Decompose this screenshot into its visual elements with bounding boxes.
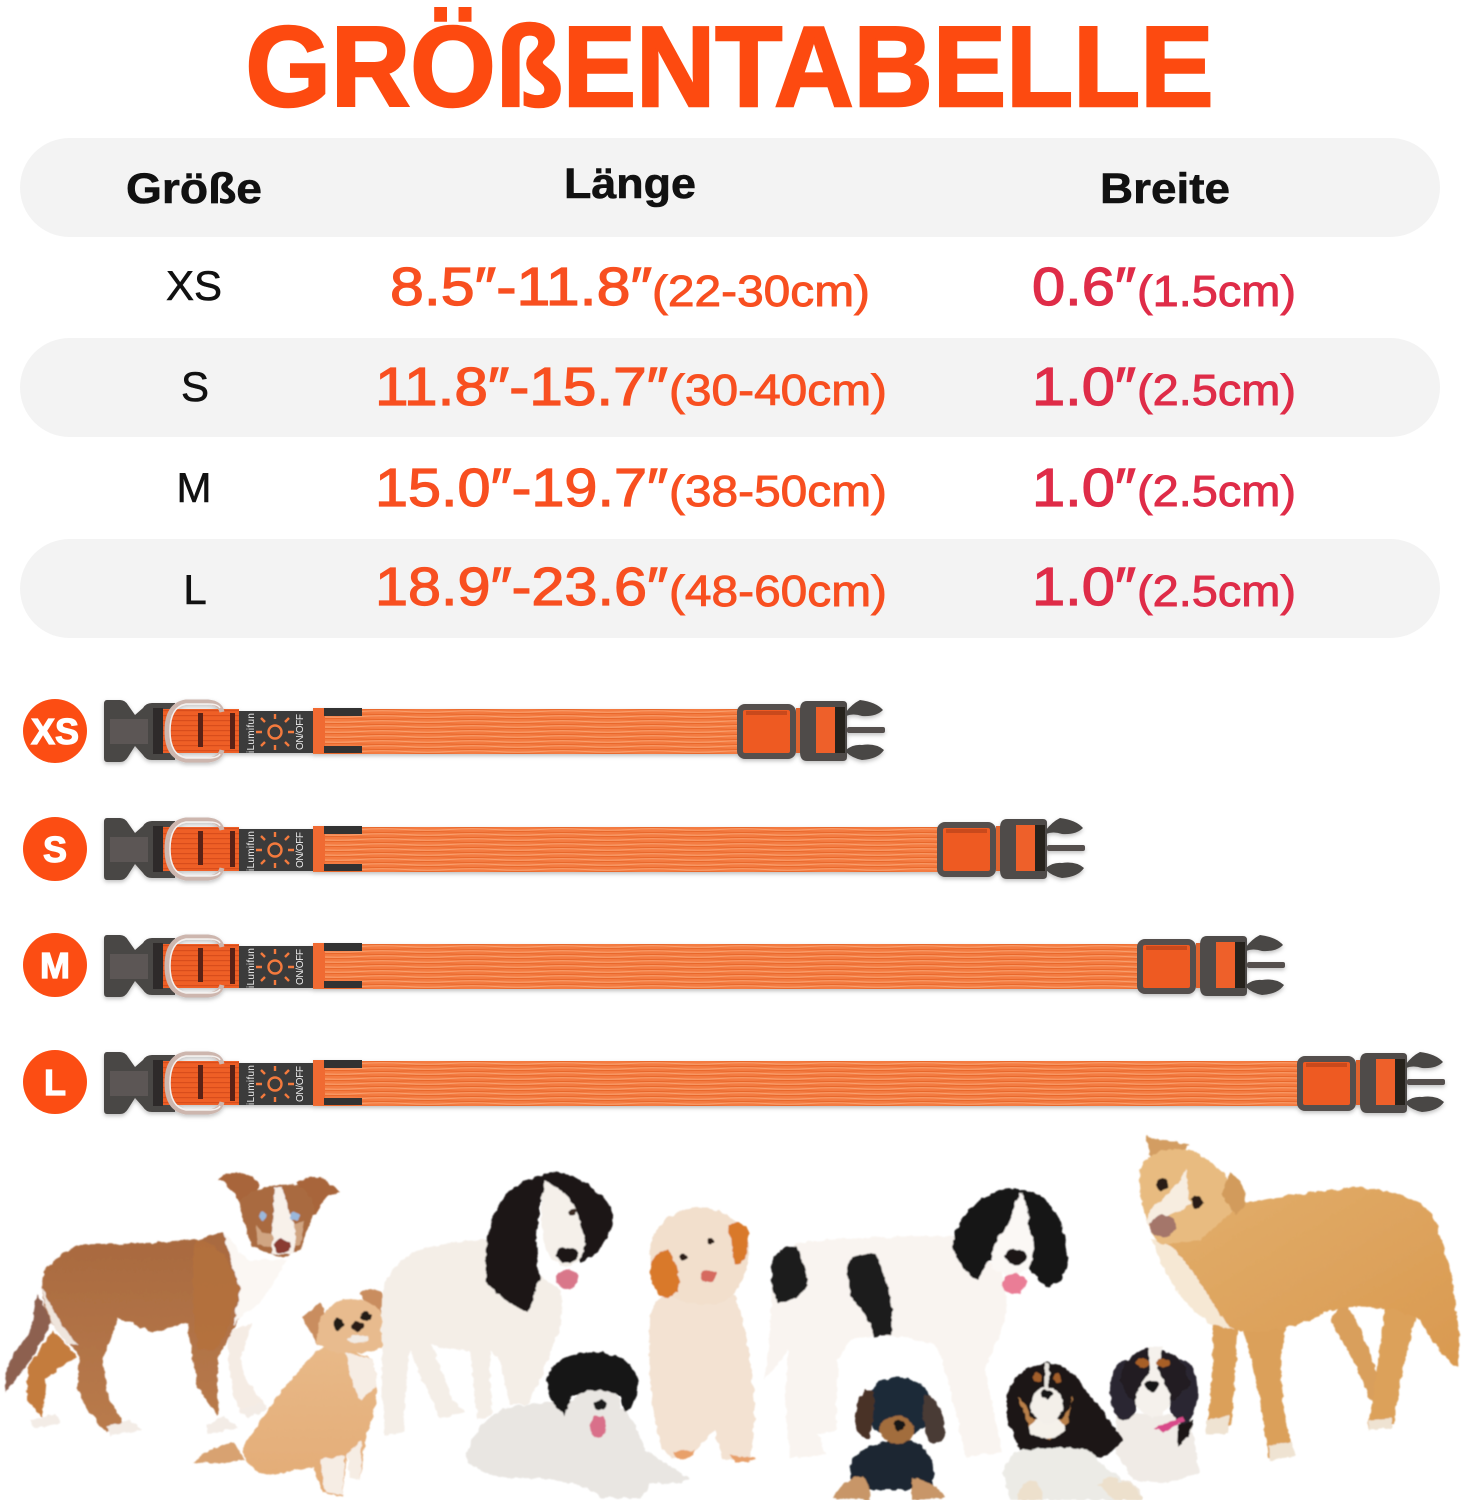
row M [176,458,1296,518]
row S: (30-40cm) [669,366,887,415]
collar L with size badge: iLumifun [246,1065,257,1105]
collar XS with size badge: ON/OFF [295,714,306,750]
row XS: XS [166,262,222,309]
table header row: Größe [126,165,262,213]
row M: (38-50cm) [669,467,887,516]
table header row [20,138,1440,237]
collar L with size badge: L [44,1062,66,1103]
collar M with size badge: ON/OFF [295,949,306,985]
collar L with size badge: ON/OFF [295,1066,306,1102]
row M: M [176,464,212,511]
table header row: Länge [564,160,696,208]
dog: black and white lying [465,1352,689,1498]
row XS: 8.5″-11.8″ [390,257,652,317]
row XS [166,257,1296,317]
collar M with size badge: M [40,945,70,986]
row XS: 0.6″ [1032,257,1136,317]
row S [20,338,1440,437]
row M: (2.5cm) [1137,467,1296,516]
title: GRÖßENTABELLE [246,4,1214,131]
row L [20,539,1440,638]
dog: brown shepherd puppy [5,1173,341,1435]
collar XS with size badge: iLumifun [246,713,257,753]
size table [20,138,1440,638]
row S: 11.8″-15.7″ [375,357,668,417]
row XS: (1.5cm) [1137,267,1296,316]
collar M with size badge: iLumifun [246,948,257,988]
row S: 1.0″ [1032,357,1136,417]
dog: cavalier spaniel lying [1003,1363,1142,1500]
group of dogs photo [5,1136,1460,1500]
collar S with size badge: iLumifun [246,831,257,871]
row L: (48-60cm) [669,567,887,616]
collar S with size badge: S [43,829,67,870]
collar S with size badge [23,817,1085,881]
row L: 18.9″-23.6″ [375,557,668,617]
dog: golden retriever [1140,1136,1460,1460]
collar M with size badge [23,933,1285,997]
collar XS with size badge: XS [31,711,79,752]
collar XS with size badge [23,699,885,763]
dog: white and black standing [381,1172,613,1436]
dog: cavalier spaniel sitting [1105,1347,1200,1500]
row L: (2.5cm) [1137,567,1296,616]
dog: curly poodle [649,1207,755,1462]
collar L with size badge [23,1050,1445,1114]
row M: 15.0″-19.7″ [375,458,668,518]
row L: L [183,566,207,613]
dog: tan chihuahua sitting [193,1289,388,1497]
dog: large white and black puppy [764,1189,1068,1458]
row S: S [181,363,209,410]
row M: 1.0″ [1032,458,1136,518]
dog: dachshund puppy [834,1377,946,1500]
collar S with size badge: ON/OFF [295,832,306,868]
row XS: (22-30cm) [652,267,870,316]
row L: 1.0″ [1032,557,1136,617]
table header row: Breite [1100,165,1230,213]
row S: (2.5cm) [1137,366,1296,415]
